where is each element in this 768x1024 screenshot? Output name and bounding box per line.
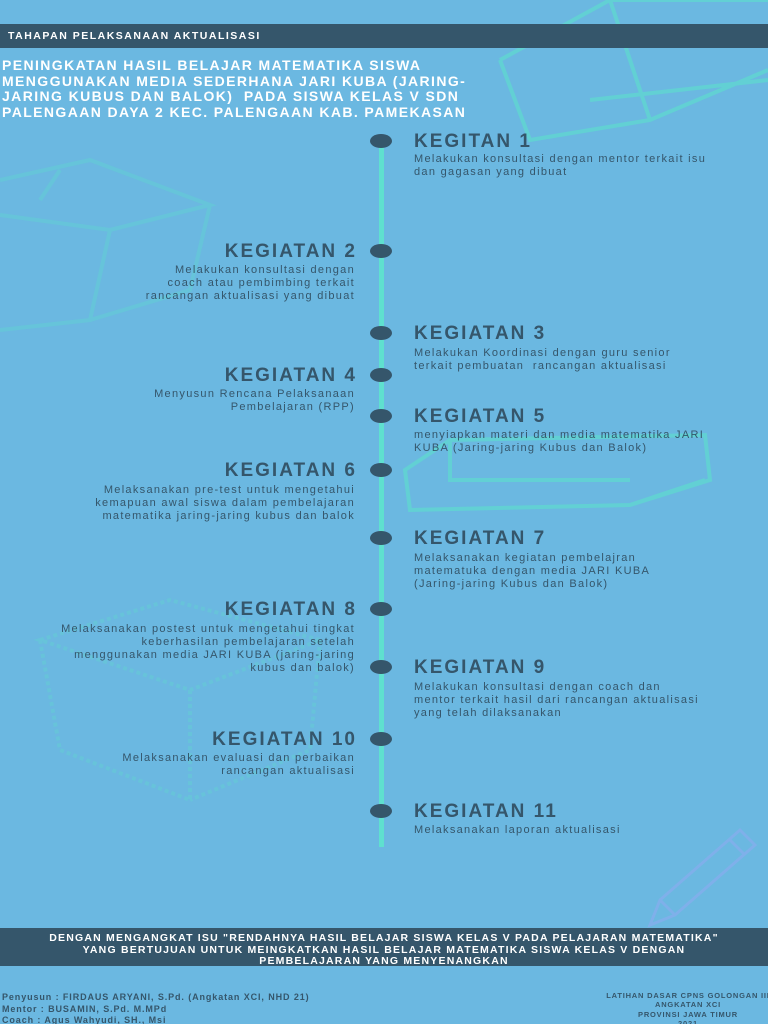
timeline: KEGIATAN 10 [212, 729, 357, 750]
footer: program: PROVINSI JAWA TIMUR [638, 1010, 738, 1019]
timeline: KEGIATAN 8 [225, 599, 357, 620]
timeline: matematuka dengan media JARI KUBA [414, 565, 650, 577]
timeline: (Jaring-jaring Kubus dan Balok) [414, 578, 608, 590]
timeline: KEGIATAN 3 [414, 323, 546, 344]
banner: conclusion: PEMBELAJARAN YANG MENYENANGKAN [259, 955, 509, 967]
timeline: menyiapkan materi dan media matematika JARI [414, 429, 704, 441]
timeline: dan gagasan yang dibuat [414, 166, 567, 178]
timeline: coach atau pembimbing terkait [167, 277, 355, 289]
timeline: Melaksanakan postest untuk mengetahui tingkat [61, 623, 355, 635]
timeline: Melakukan Koordinasi dengan guru senior [414, 347, 671, 359]
timeline: KEGIATAN 7 [414, 528, 546, 549]
timeline: mentor terkait hasil dari rancangan aktualisasi [414, 694, 699, 706]
timeline: rancangan aktualisasi [221, 765, 355, 777]
timeline: rancangan aktualisasi yang dibuat [146, 290, 355, 302]
timeline: Melaksanakan pre-test untuk mengetahui [104, 484, 355, 496]
timeline: kubus dan balok) [250, 662, 355, 674]
timeline [61, 131, 706, 836]
header bar: TAHAPAN PELAKSANAAN AKTUALISASI [8, 30, 261, 42]
footer: program: LATIHAN DASAR CPNS GOLONGAN III [606, 991, 768, 1000]
timeline: Melaksanakan evaluasi dan perbaikan [122, 752, 355, 764]
timeline: keberhasilan pembelajaran setelah [141, 636, 355, 648]
timeline: terkait pembuatan rancangan aktualisasi [414, 360, 667, 372]
timeline: yang telah dilaksanakan [414, 707, 562, 719]
timeline: Menyusun Rencana Pelaksanaan [154, 388, 355, 400]
title: MENGGUNAKAN MEDIA SEDERHANA JARI KUBA (JARING- [2, 72, 466, 88]
timeline: Melakukan konsultasi dengan coach dan [414, 681, 661, 693]
timeline: KEGIATAN 11 [414, 801, 558, 822]
title: PENINGKATAN HASIL BELAJAR MATEMATIKA SISWA [2, 57, 421, 73]
banner: conclusion: YANG BERTUJUAN UNTUK MEINGKATKAN HASIL BELAJAR MATEMATIKA SISWA KELAS V DENGAN [83, 944, 685, 956]
footer: credits: Penyusun : FIRDAUS ARYANI, S.Pd. (Angkatan XCI, NHD 21) [2, 992, 310, 1002]
footer: credits [2, 992, 310, 1024]
banner: conclusion [0, 928, 768, 966]
timeline: Melaksanakan kegiatan pembelajran [414, 552, 636, 564]
icon: pencil [648, 828, 757, 928]
timeline: matematika jaring-jaring kubus dan balok [102, 510, 355, 522]
timeline: kemapuan awal siswa dalam pembelajaran [95, 497, 355, 509]
title: PALENGAAN DAYA 2 KEC. PALENGAAN KAB. PAMEKASAN [2, 104, 466, 120]
timeline: menggunakan media JARI KUBA (jaring-jaring [74, 649, 355, 661]
header bar [0, 24, 768, 48]
timeline: KEGIATAN 2 [225, 241, 357, 262]
footer: credits: Mentor : BUSAMIN, S.Pd. M.MPd [2, 1004, 167, 1014]
timeline: KEGITAN 1 [414, 131, 532, 152]
timeline: KEGIATAN 5 [414, 406, 546, 427]
timeline: KEGIATAN 4 [225, 365, 357, 386]
title: JARING KUBUS DAN BALOK) PADA SISWA KELAS V SDN [2, 88, 459, 104]
footer: program [606, 991, 768, 1024]
timeline: Melakukan konsultasi dengan mentor terkait isu [414, 153, 706, 165]
title [2, 57, 466, 120]
timeline: KEGIATAN 9 [414, 657, 546, 678]
timeline: Pembelajaran (RPP) [231, 401, 355, 413]
timeline: KEGIATAN 6 [225, 460, 357, 481]
timeline: Melaksanakan laporan aktualisasi [414, 824, 621, 836]
timeline line [379, 140, 384, 847]
banner: conclusion: DENGAN MENGANGKAT ISU "RENDAHNYA HASIL BELAJAR SISWA KELAS V PADA PELAJARAN MATEMATIKA" [49, 932, 719, 944]
timeline: Melakukan konsultasi dengan [175, 264, 355, 276]
footer: program: ANGKATAN XCI [655, 1000, 721, 1009]
timeline: KUBA (Jaring-jaring Kubus dan Balok) [414, 442, 647, 454]
